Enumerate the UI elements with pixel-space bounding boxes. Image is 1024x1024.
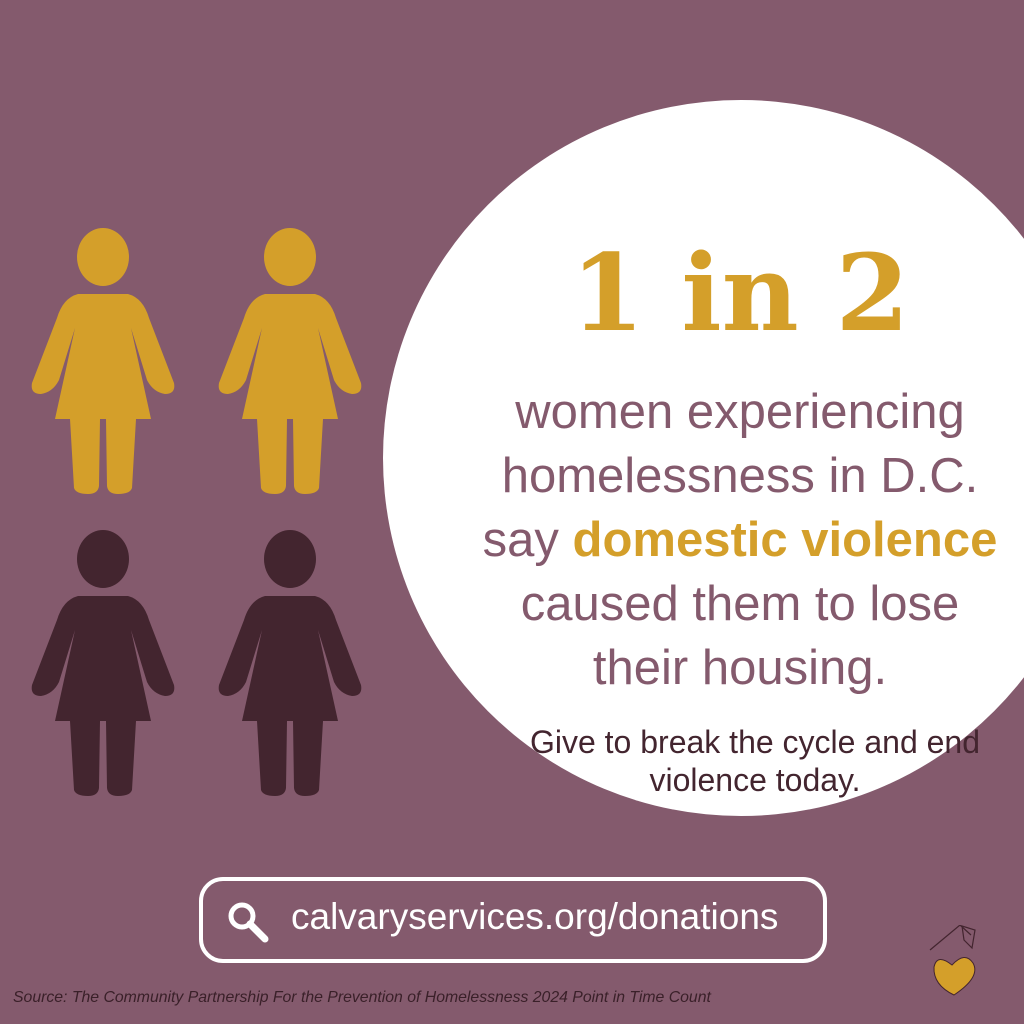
text block: statistic bbox=[483, 385, 997, 695]
source: Source: The Community Partnership For the Prevention of Homelessness 2024 Point in Time Count bbox=[13, 989, 711, 1006]
icon: woman 1 bbox=[32, 228, 174, 494]
text block: call to action bbox=[530, 724, 980, 798]
icon: logo bbox=[930, 925, 976, 996]
heading: 1 in 2: 1 in 2 bbox=[571, 230, 909, 355]
text block: call to action: Give to break the cycle and end bbox=[530, 724, 980, 760]
text block: statistic: their housing. bbox=[593, 641, 887, 695]
url text: calvaryservices.org/donations bbox=[291, 896, 778, 937]
text block: call to action: violence today. bbox=[649, 762, 861, 798]
icon: woman 2 bbox=[219, 228, 361, 494]
text block: statistic: homelessness in D.C. bbox=[502, 449, 978, 503]
search bar bbox=[199, 877, 827, 963]
text block: statistic: say domestic violence bbox=[483, 513, 997, 567]
icon: woman 4 bbox=[219, 530, 361, 796]
panel: white circle bbox=[383, 100, 1024, 816]
panel: figures bbox=[32, 228, 362, 796]
icon: woman 3 bbox=[32, 530, 174, 796]
text block: statistic: women experiencing bbox=[515, 385, 965, 439]
text block: statistic: caused them to lose bbox=[521, 577, 959, 631]
icon: magnifier bbox=[228, 902, 268, 942]
